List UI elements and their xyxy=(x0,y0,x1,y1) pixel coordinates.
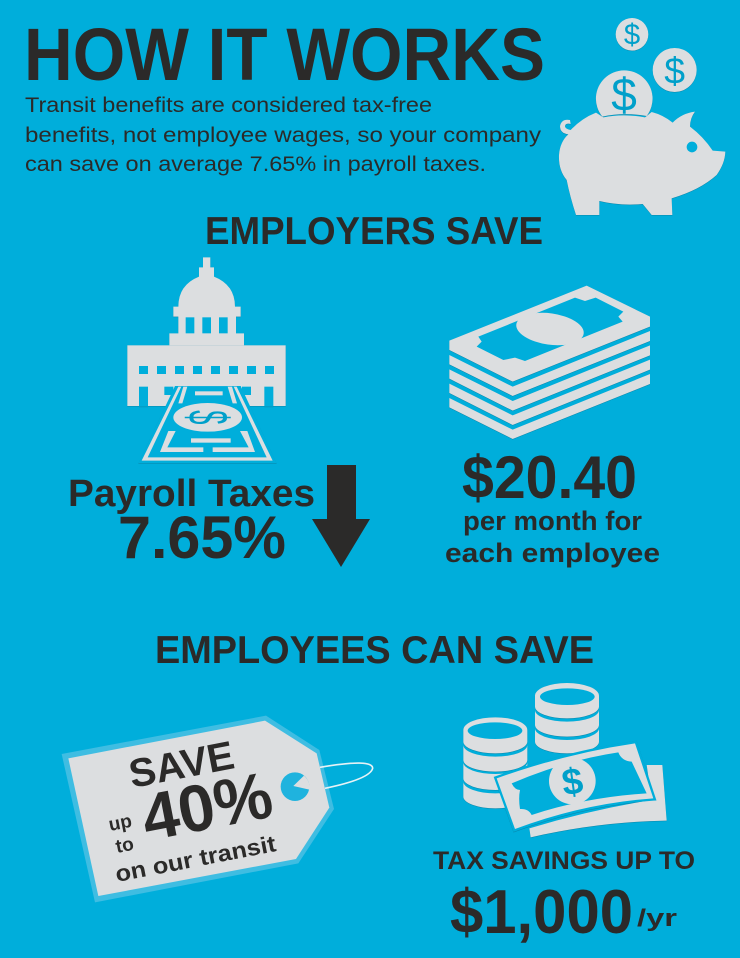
price tag: save up to 40% xyxy=(62,716,373,902)
icon: capitol building with money: $ xyxy=(175,410,239,424)
price tag: save up to 40%: SAVE xyxy=(125,733,238,797)
label: per month for each employee: each employee xyxy=(445,538,660,568)
intro text: benefits, not employee wages, so your company xyxy=(25,124,542,147)
heading: employees can save: EMPLOYEES CAN SAVE xyxy=(155,629,594,672)
figure: $20.40: $20.40 xyxy=(462,444,637,511)
heading: employers save: EMPLOYERS SAVE xyxy=(205,210,543,253)
icon: coins and cash: $ xyxy=(559,759,586,804)
icon: stack of money xyxy=(449,286,650,439)
label: payroll taxes: Payroll Taxes xyxy=(68,473,315,515)
label: tax savings up to: TAX SAVINGS UP TO xyxy=(433,847,695,875)
price tag: save up to 40%: to xyxy=(114,834,136,858)
intro text xyxy=(25,94,542,176)
title: HOW IT WORKS xyxy=(24,13,545,96)
icon: piggy bank with coins: $ xyxy=(664,49,685,91)
icon: piggy bank with coins: $ xyxy=(611,69,637,121)
price tag: save up to 40%: on our transit xyxy=(113,830,278,887)
arrow: down xyxy=(312,465,370,567)
label: per month for each employee: per month for xyxy=(463,506,642,536)
price tag: save up to 40%: up xyxy=(107,811,134,836)
icon: coins and cash xyxy=(463,683,667,837)
intro text: Transit benefits are considered tax-free xyxy=(25,94,432,117)
figure: $1,000 per year: $1,000 xyxy=(450,878,633,947)
icon: capitol building with money xyxy=(127,257,286,463)
figure: 7.65%: 7.65% xyxy=(118,504,286,571)
price tag: save up to 40%: 40% xyxy=(136,757,278,855)
figure: $1,000 per year: /yr xyxy=(637,905,677,932)
icon: piggy bank with coins xyxy=(559,18,725,215)
intro text: can save on average 7.65% in payroll taxes. xyxy=(25,153,486,176)
label: per month for each employee xyxy=(445,506,660,568)
icon: piggy bank with coins: $ xyxy=(624,19,640,52)
